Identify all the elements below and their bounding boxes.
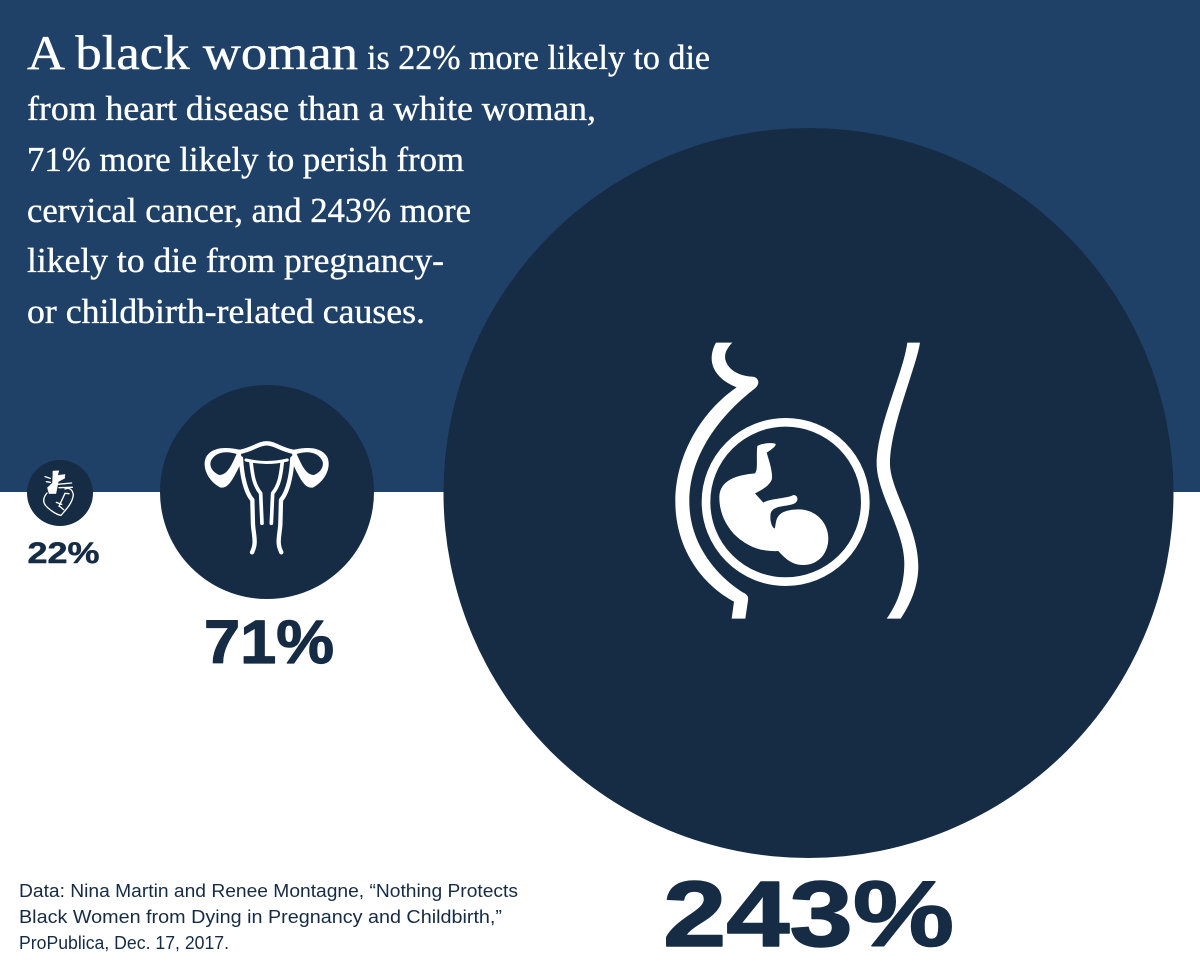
icon: uterus: [205, 443, 329, 552]
small circle: heart disease: [27, 460, 93, 526]
headline text: [27, 25, 710, 331]
blue header background: [0, 0, 1200, 492]
label: 243%: 243%: [663, 862, 954, 966]
label: 71%: 71%: [204, 608, 334, 676]
icon: pregnant body with fetus: [675, 343, 920, 619]
medium circle: cervical cancer: [160, 385, 374, 599]
icon: heart: [44, 471, 73, 515]
headline text: A black woman: [27, 25, 358, 80]
headline text: cervical cancer, and 243% more: [27, 191, 471, 230]
label: 22%: 22%: [28, 537, 100, 570]
headline text: or childbirth-related causes.: [27, 292, 425, 331]
source note: Black Women from Dying in Pregnancy and Childbirth,”: [19, 907, 502, 927]
icon part: ovaries: [205, 448, 329, 488]
headline text: is 22% more likely to die: [367, 38, 710, 77]
headline text: from heart disease than a white woman,: [27, 89, 596, 128]
source note: ProPublica, Dec. 17, 2017.: [19, 933, 229, 953]
headline text: 71% more likely to perish from: [27, 140, 464, 179]
large circle: pregnancy: [444, 128, 1174, 858]
source note: Data: Nina Martin and Renee Montagne, “Nothing Protects: [19, 881, 518, 901]
source note: [19, 881, 518, 953]
headline text: likely to die from pregnancy-: [27, 241, 444, 280]
